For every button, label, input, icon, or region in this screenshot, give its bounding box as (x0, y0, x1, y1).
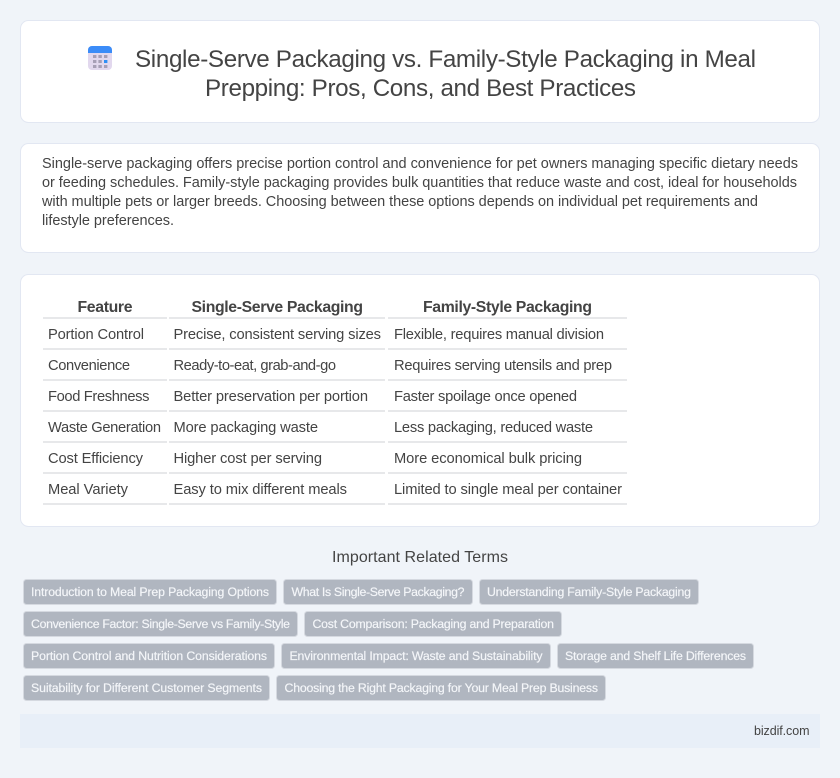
row: waste generation: Less packaging, reduced waste (394, 420, 593, 436)
table grid lines (43, 318, 627, 504)
tag (24, 644, 274, 668)
table header: Feature (78, 299, 133, 316)
row: convenience: Ready-to-eat, grab-and-go (174, 358, 336, 374)
title: Single-Serve Packaging vs. Family-Style Packaging in Meal (135, 46, 756, 73)
tag: Choosing the Right Packaging for Your Meal Prep Business (284, 681, 598, 695)
summary text: with multiple pets or larger breeds. Choosing between these options depends on individual pet requirements and (41, 194, 758, 210)
tag (24, 580, 276, 604)
tag: Convenience Factor: Single-Serve vs Family-Style (31, 617, 290, 631)
tag (276, 676, 606, 700)
icon: calendar (88, 46, 112, 70)
row: portion control (48, 327, 604, 343)
row: convenience: Requires serving utensils and prep (394, 358, 612, 374)
panel: title card (20, 20, 820, 122)
tag (480, 580, 698, 604)
row: food freshness: Better preservation per portion (174, 389, 368, 405)
tag: Introduction to Meal Prep Packaging Options (31, 585, 269, 599)
tag (304, 612, 562, 636)
tag: Understanding Family-Style Packaging (487, 585, 691, 599)
row: meal variety: Easy to mix different meals (174, 482, 347, 498)
tag (24, 676, 270, 700)
tag: Suitability for Different Customer Segments (31, 681, 262, 695)
table header: Single-Serve Packaging (192, 299, 363, 316)
row: convenience: Convenience (48, 358, 130, 374)
table header (78, 299, 592, 316)
summary text: or feeding schedules. Family-style packaging provides bulk quantities that reduce waste and cost, ideal for households (42, 175, 797, 191)
tag (284, 580, 472, 604)
row: food freshness: Food Freshness (48, 389, 150, 405)
summary text: lifestyle preferences. (42, 213, 174, 229)
tag: Environmental Impact: Waste and Sustainability (290, 649, 543, 663)
row: portion control: Portion Control (48, 327, 144, 343)
row: convenience (48, 358, 612, 374)
title: Prepping: Pros, Cons, and Best Practices (205, 75, 636, 102)
row: cost efficiency: Higher cost per serving (174, 451, 322, 467)
row: waste generation (48, 420, 593, 436)
summary text: Single-serve packaging offers precise portion control and convenience for pet owners managing specific dietary needs (42, 156, 798, 172)
footer (20, 714, 820, 748)
footer: bizdif.com (754, 724, 810, 738)
title (135, 46, 756, 102)
row: cost efficiency (48, 451, 582, 467)
table header: Family-Style Packaging (423, 299, 592, 316)
row: meal variety: Limited to single meal per container (394, 482, 622, 498)
tag: Storage and Shelf Life Differences (565, 649, 746, 663)
row: portion control: Flexible, requires manual division (394, 327, 604, 343)
tag (24, 612, 298, 636)
row: waste generation: More packaging waste (174, 420, 318, 436)
row: cost efficiency: More economical bulk pricing (394, 451, 582, 467)
tag: Cost Comparison: Packaging and Preparation (312, 617, 554, 631)
tag: What Is Single-Serve Packaging? (292, 585, 465, 599)
panel: comparison table card (20, 274, 820, 526)
row: waste generation: Waste Generation (48, 420, 161, 436)
row: meal variety (48, 482, 622, 498)
row: meal variety: Meal Variety (48, 482, 129, 498)
tag (558, 644, 754, 668)
row: portion control: Precise, consistent serving sizes (174, 327, 381, 343)
related terms tags (24, 580, 754, 700)
tag (282, 644, 550, 668)
row: food freshness: Faster spoilage once opened (394, 389, 577, 405)
row: cost efficiency: Cost Efficiency (48, 451, 144, 467)
heading: important related terms: Important Related Terms (332, 549, 508, 566)
row: food freshness (48, 389, 577, 405)
panel: summary card (20, 144, 820, 252)
tag: Portion Control and Nutrition Considerations (31, 649, 267, 663)
summary text (41, 156, 798, 229)
